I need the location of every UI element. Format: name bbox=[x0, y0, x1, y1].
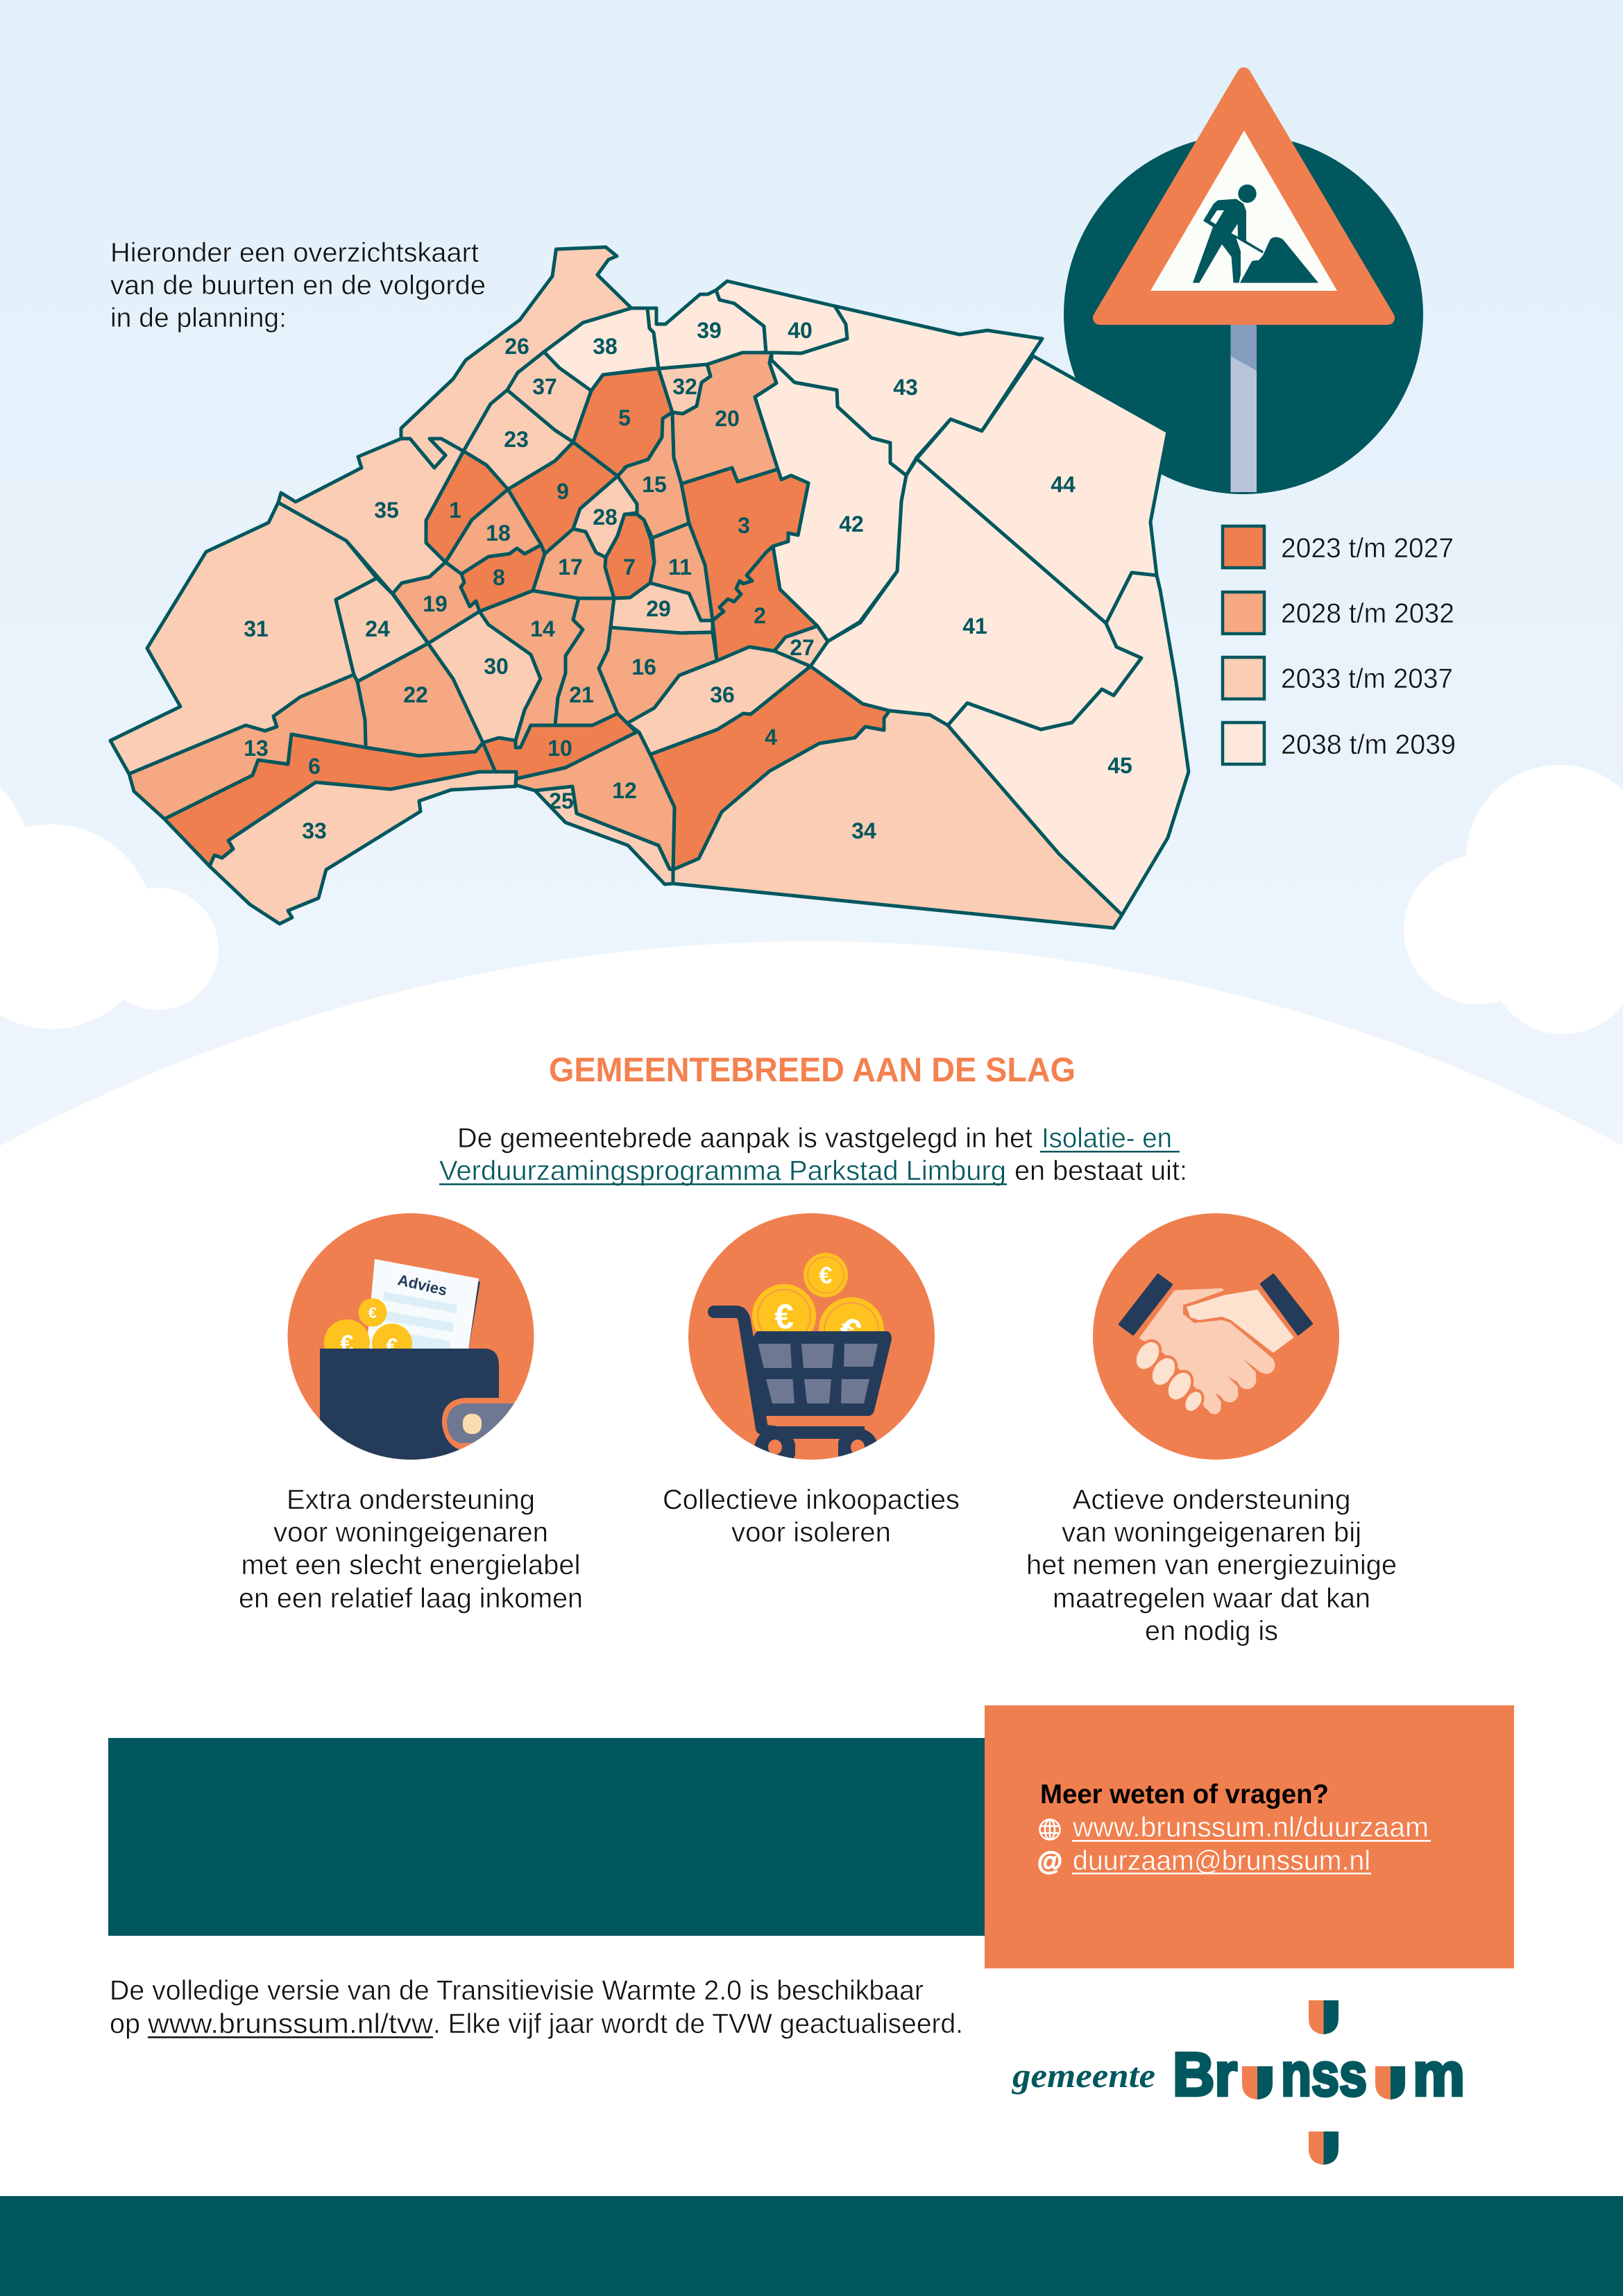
coins: € bbox=[368, 1304, 377, 1322]
buurt 21: 21 bbox=[569, 682, 594, 707]
buurt 13 bbox=[129, 675, 366, 819]
cart coins bbox=[752, 1253, 884, 1332]
buurt 4: 4 bbox=[765, 725, 777, 750]
buurt 14 bbox=[479, 591, 583, 748]
buurt 12: 12 bbox=[612, 778, 637, 803]
cart coins: € bbox=[819, 1263, 833, 1289]
caption 3 bbox=[1026, 1485, 1397, 1646]
caption 3: Actieve ondersteuning bbox=[1073, 1485, 1350, 1515]
buurt 31: 31 bbox=[244, 616, 269, 641]
logo gemeente Brunssum bbox=[1012, 2000, 1465, 2165]
buurt 10: 10 bbox=[547, 736, 572, 761]
buurt 37 bbox=[507, 352, 591, 442]
buurt 8: 8 bbox=[493, 565, 505, 590]
buurt 44 bbox=[917, 356, 1168, 623]
buurt 10 bbox=[483, 714, 636, 779]
buurt 43: 43 bbox=[893, 375, 918, 400]
icon: at sign: @ bbox=[1037, 1847, 1062, 1875]
cloud left bbox=[0, 753, 219, 1029]
buurt 45 bbox=[948, 573, 1189, 915]
buurt 28: 28 bbox=[593, 505, 618, 530]
legend item 2028-2032: 2028 t/m 2032 bbox=[1281, 598, 1454, 629]
buurt 5 bbox=[573, 369, 672, 476]
icon: wallet with advice and coins bbox=[287, 1213, 541, 1471]
buurt 45: 45 bbox=[1107, 753, 1132, 778]
buurt 18 bbox=[445, 489, 541, 574]
warning triangle bbox=[1100, 74, 1388, 318]
buurt 39 bbox=[647, 290, 766, 369]
logo shield bottom bbox=[1309, 2132, 1339, 2165]
buurt 4 bbox=[650, 666, 890, 870]
buurt 7: 7 bbox=[623, 555, 636, 580]
buurt 30 bbox=[428, 611, 541, 743]
caption 3: maatregelen waar dat kan bbox=[1053, 1583, 1370, 1614]
caption 1 bbox=[239, 1485, 583, 1614]
heading: GEMEENTEBREED AAN DE SLAG bbox=[549, 1052, 1076, 1089]
legend item 2038-2039 bbox=[1223, 723, 1456, 764]
buurt 38: 38 bbox=[593, 334, 618, 359]
coins: € bbox=[341, 1331, 354, 1357]
e-mail link: duurzaam@brunssum.nl bbox=[1073, 1846, 1370, 1876]
buurt 5: 5 bbox=[618, 405, 631, 430]
intro paragraph: en bestaat uit: bbox=[1014, 1156, 1187, 1186]
buurt 20 bbox=[672, 353, 778, 484]
buurt 30: 30 bbox=[484, 654, 509, 679]
buurt 2: 2 bbox=[754, 603, 766, 628]
buurt 40 bbox=[716, 281, 847, 353]
intro text bbox=[110, 238, 486, 333]
buurt 9 bbox=[508, 442, 618, 554]
buurt 1 bbox=[426, 451, 508, 562]
buurt 25 bbox=[535, 786, 673, 884]
caption 3: en nodig is bbox=[1145, 1616, 1278, 1646]
legend bbox=[1223, 526, 1456, 764]
logo word Brunssum: nss bbox=[1281, 2040, 1367, 2109]
buurt 18: 18 bbox=[486, 521, 511, 546]
intro paragraph bbox=[439, 1123, 1187, 1186]
buurt 3 bbox=[681, 468, 808, 621]
buurt 41 bbox=[810, 459, 1141, 729]
buurt 33 bbox=[210, 772, 516, 924]
icon: handshake bbox=[1093, 1213, 1339, 1460]
buurt 37: 37 bbox=[532, 374, 557, 399]
wallet clasp bbox=[442, 1398, 518, 1449]
website link: www.brunssum.nl/duurzaam bbox=[1072, 1812, 1429, 1843]
intro text: van de buurten en de volgorde bbox=[110, 271, 486, 301]
logo word Brunssum: m bbox=[1413, 2040, 1465, 2109]
sign background circle bbox=[1064, 135, 1423, 494]
buurt 35: 35 bbox=[374, 498, 399, 523]
intro text: Hieronder een overzichtskaart bbox=[110, 238, 479, 268]
buurt 16 bbox=[599, 627, 717, 723]
buurt 38 bbox=[544, 308, 658, 391]
left hand bbox=[1139, 1288, 1275, 1415]
legend item 2028-2032 bbox=[1223, 592, 1454, 634]
icon: globe bbox=[1039, 1819, 1060, 1840]
buurt 34: 34 bbox=[851, 818, 876, 843]
buurt 27: 27 bbox=[790, 635, 815, 660]
buurt 19 bbox=[393, 562, 479, 643]
cuffs bbox=[1120, 1275, 1311, 1334]
buurt 22 bbox=[357, 643, 485, 756]
buurt 17: 17 bbox=[558, 555, 583, 580]
buurt 28 bbox=[573, 476, 637, 557]
legend item 2033-2037: 2033 t/m 2037 bbox=[1281, 664, 1453, 694]
right hand bbox=[1187, 1290, 1293, 1353]
buurt 32 bbox=[658, 364, 711, 414]
buurt 15 bbox=[618, 412, 689, 538]
buurt 9: 9 bbox=[556, 479, 569, 504]
caption 1: met een slecht energielabel bbox=[241, 1550, 580, 1580]
buurt 16: 16 bbox=[631, 655, 656, 679]
bottom teal band bbox=[0, 2196, 1623, 2296]
cart windows bbox=[758, 1344, 878, 1403]
icon: road worker bbox=[1193, 185, 1318, 283]
buurt 23: 23 bbox=[504, 427, 529, 452]
caption 1: Extra ondersteuning bbox=[287, 1485, 535, 1515]
advice paper bbox=[366, 1259, 480, 1350]
buurt 35 bbox=[278, 439, 464, 594]
caption 3: van woningeigenaren bij bbox=[1062, 1517, 1361, 1548]
panel: contact bbox=[985, 1705, 1514, 1968]
buurt 21 bbox=[555, 598, 618, 725]
buurt 26: 26 bbox=[504, 334, 529, 359]
buurt 24: 24 bbox=[365, 616, 390, 641]
icon: shopping cart with coins bbox=[688, 1213, 935, 1470]
buurt 17 bbox=[533, 529, 614, 598]
buurt 6: 6 bbox=[308, 754, 321, 779]
logo word gemeente: gemeente bbox=[1012, 2056, 1155, 2095]
buurt 15: 15 bbox=[642, 472, 667, 497]
buurt 34 bbox=[673, 711, 1122, 928]
buurt 22: 22 bbox=[403, 682, 428, 707]
buurt 14: 14 bbox=[530, 616, 555, 641]
buurt 20: 20 bbox=[715, 406, 740, 431]
logo shield top bbox=[1309, 2000, 1339, 2034]
footnote text bbox=[110, 1975, 963, 2039]
white hill bbox=[0, 941, 1623, 2296]
buurt 44: 44 bbox=[1051, 472, 1076, 497]
cart coins: € bbox=[833, 1309, 867, 1352]
sky background bbox=[0, 0, 1623, 1180]
buurt 32: 32 bbox=[672, 374, 697, 399]
buurt 2 bbox=[713, 546, 817, 661]
buurt 36: 36 bbox=[710, 682, 735, 707]
buurt 26 bbox=[401, 247, 631, 468]
triangle white inner bbox=[1150, 130, 1337, 291]
logo word Brunssum bbox=[1173, 2040, 1465, 2109]
buurt 41: 41 bbox=[962, 614, 987, 639]
footnote text: De volledige versie van de Transitievisie Warmte 2.0 is beschikbaar bbox=[110, 1975, 924, 2006]
buurt 12 bbox=[516, 732, 674, 870]
buurt 39: 39 bbox=[697, 318, 722, 343]
advice paper: Advies bbox=[396, 1271, 449, 1299]
buurt 11: 11 bbox=[668, 555, 692, 580]
coins bbox=[324, 1298, 412, 1349]
cart frame bbox=[714, 1312, 892, 1470]
buurt 7 bbox=[605, 514, 654, 598]
caption 1: voor woningeigenaren bbox=[273, 1517, 548, 1548]
intro paragraph: Isolatie- en bbox=[1042, 1123, 1172, 1154]
legend item 2023-2027 bbox=[1223, 526, 1454, 568]
buurt 6 bbox=[164, 734, 495, 866]
intro text: in de planning: bbox=[110, 303, 287, 333]
buurt 36 bbox=[627, 647, 810, 754]
intro paragraph: De gemeentebrede aanpak is vastgelegd in het bbox=[457, 1123, 1033, 1154]
buurt 3: 3 bbox=[738, 513, 750, 538]
caption 3: het nemen van energiezuinige bbox=[1026, 1550, 1397, 1580]
buurt 27 bbox=[774, 626, 828, 666]
fingers bbox=[1130, 1336, 1207, 1416]
coins: € bbox=[386, 1335, 398, 1358]
teal banner bbox=[108, 1738, 985, 1936]
logo word Brunssum: Br bbox=[1173, 2040, 1237, 2109]
footnote text: op bbox=[110, 2009, 140, 2039]
buurt 23 bbox=[464, 390, 573, 489]
buurt 24 bbox=[336, 578, 428, 682]
buurt 40: 40 bbox=[788, 318, 813, 343]
cart wheels bbox=[768, 1440, 865, 1460]
cart coins: € bbox=[774, 1297, 794, 1336]
caption 1: en een relatief laag inkomen bbox=[239, 1583, 583, 1614]
buurt 29: 29 bbox=[646, 596, 671, 621]
caption 2 bbox=[663, 1485, 960, 1548]
buurt 19: 19 bbox=[423, 591, 448, 616]
buurt 33: 33 bbox=[302, 818, 327, 843]
buurt 1: 1 bbox=[449, 498, 461, 523]
cloud right bbox=[1404, 765, 1623, 1034]
footnote text: . Elke vijf jaar wordt de TVW geactualiseerd. bbox=[433, 2009, 963, 2039]
road sign illustration bbox=[1064, 74, 1423, 494]
buurt 42: 42 bbox=[839, 512, 864, 537]
legend item 2038-2039: 2038 t/m 2039 bbox=[1281, 729, 1456, 760]
intro paragraph: Verduurzamingsprogramma Parkstad Limburg bbox=[439, 1156, 1006, 1186]
caption 2: voor isoleren bbox=[731, 1517, 891, 1548]
buurt 42 bbox=[755, 360, 906, 641]
buurt 25: 25 bbox=[549, 788, 574, 813]
buurt 11 bbox=[650, 523, 713, 621]
contact heading: Meer weten of vragen? bbox=[1040, 1780, 1329, 1809]
buurt 31 bbox=[110, 503, 377, 774]
footnote text: www.brunssum.nl/tvw bbox=[147, 2009, 433, 2039]
buurt 13: 13 bbox=[244, 736, 269, 761]
buurt 8 bbox=[461, 545, 545, 611]
buurt 29 bbox=[611, 583, 713, 633]
caption 2: Collectieve inkoopacties bbox=[663, 1485, 960, 1515]
map of neighbourhoods bbox=[110, 247, 1189, 928]
buurt 43 bbox=[772, 306, 1042, 475]
wallet body bbox=[320, 1349, 499, 1471]
sign post bbox=[1231, 325, 1257, 492]
legend item 2023-2027: 2023 t/m 2027 bbox=[1281, 533, 1454, 564]
legend item 2033-2037 bbox=[1223, 657, 1453, 699]
